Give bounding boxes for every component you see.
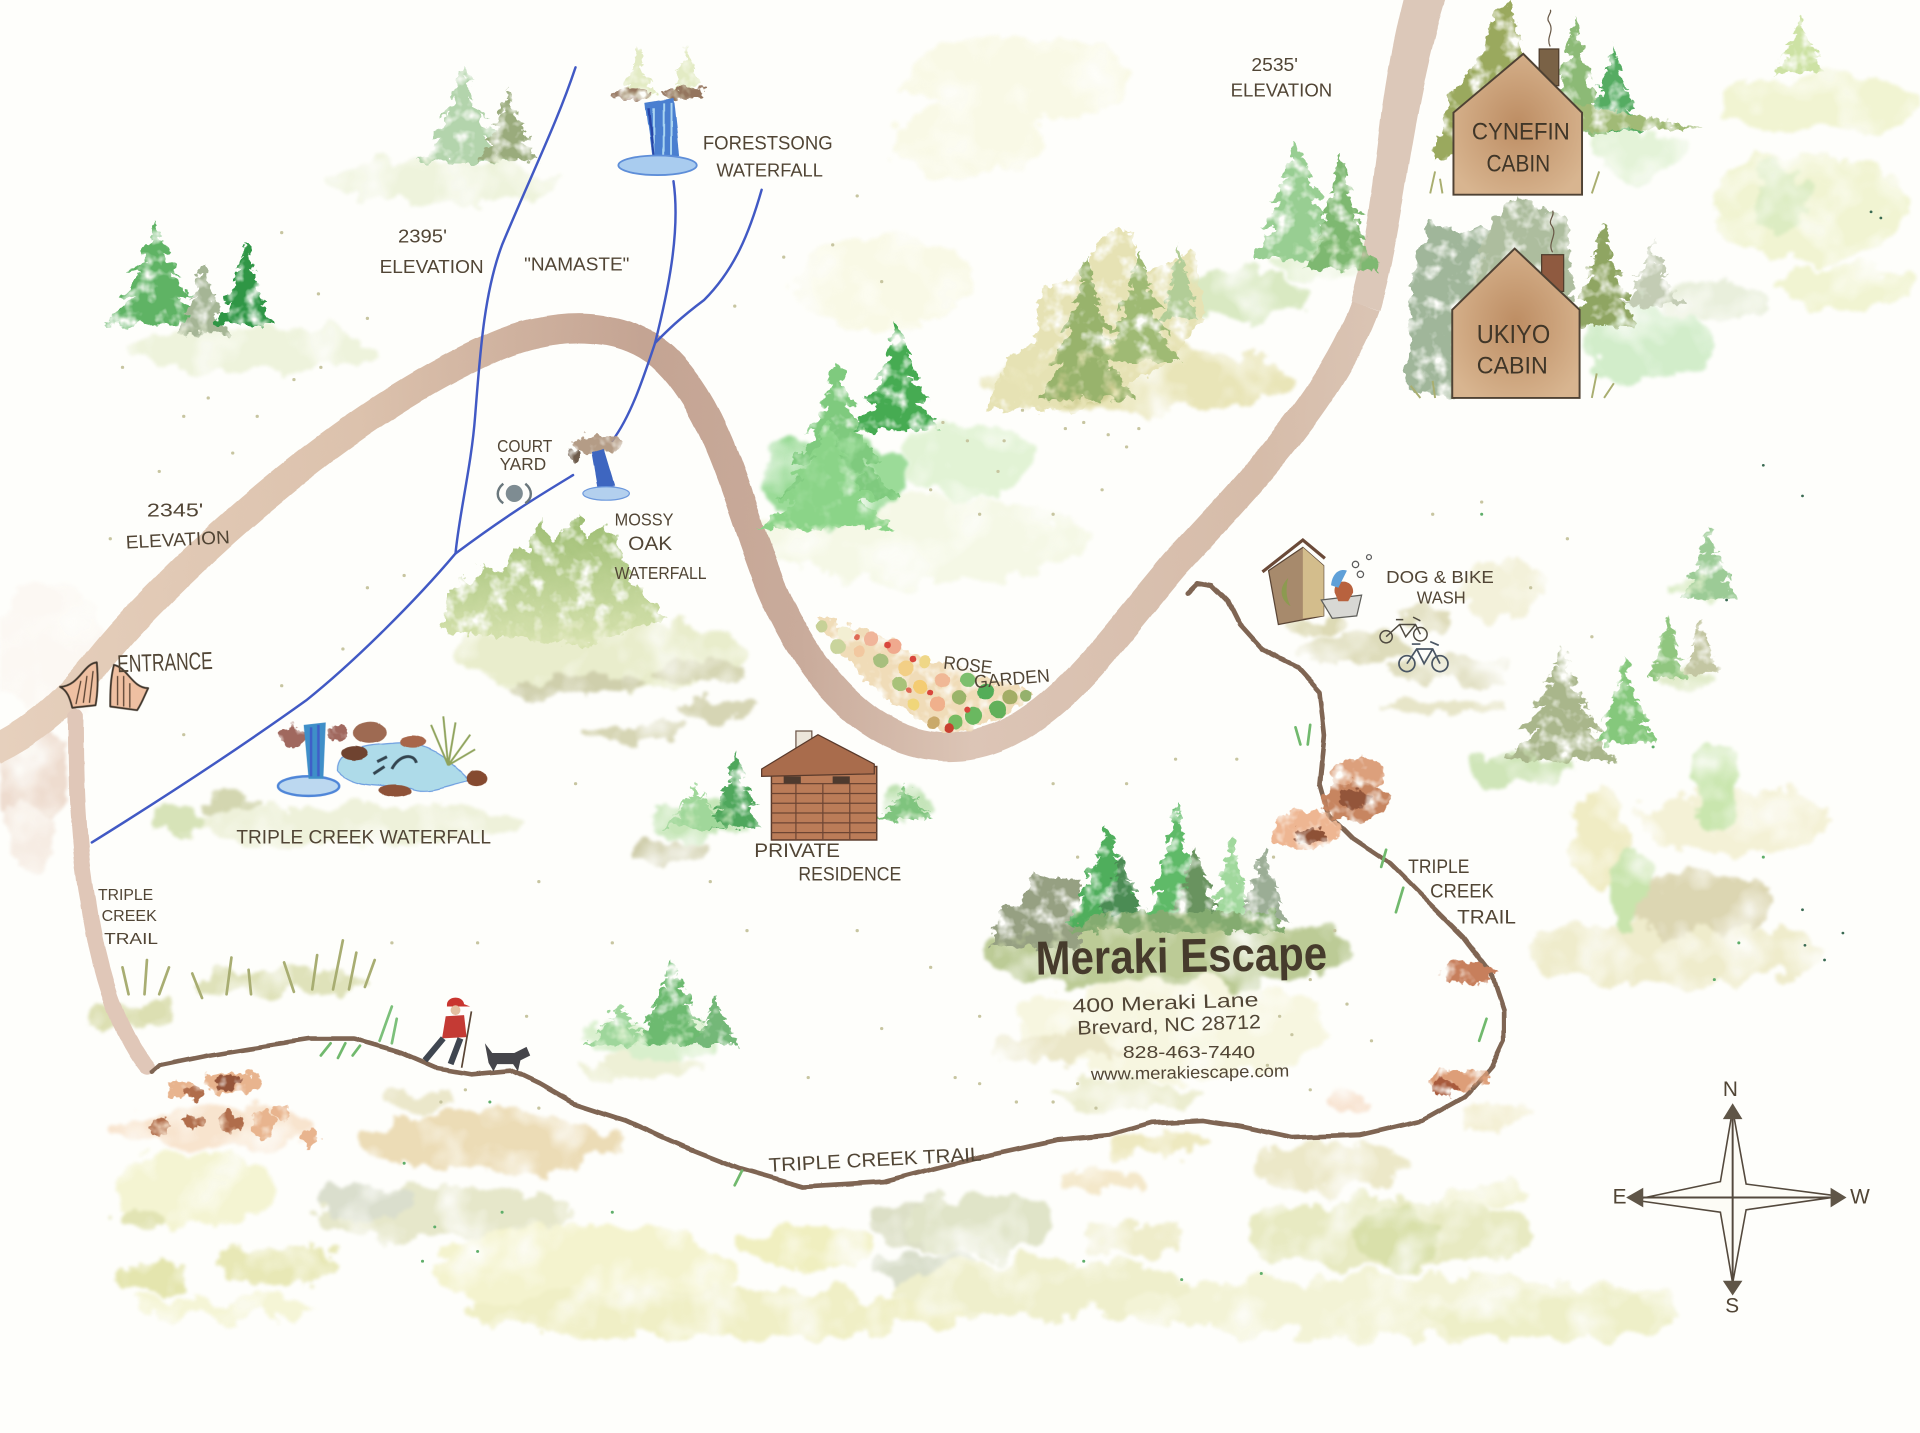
smoke [1548,10,1551,47]
rocks [569,436,621,462]
tree group: behind cynefin cabin [1433,0,1704,159]
wash: entrance stain [0,582,104,873]
label: mossy oak waterfall: WATERFALL [615,563,707,583]
dog [1334,582,1353,601]
needles [1633,1109,1840,1283]
hiking stick [462,1011,471,1068]
wash: meraki title meadow [986,916,1353,1109]
label: forestsong waterfall: FORESTSONG [703,132,833,154]
label: rose garden: ROSE [942,652,993,678]
moon [1282,578,1291,606]
falls [591,449,615,489]
entrance gates [60,662,148,710]
tree group: lower center [585,960,739,1045]
label: private residence: PRIVATE [754,840,840,862]
tree group: right side pines [1504,15,1825,761]
tree group: olive cluster [986,230,1206,410]
stream: main [92,181,676,842]
wash: right meadows [1286,563,1834,986]
hiker [425,998,471,1068]
road top right section [1351,0,1447,311]
label: 2345 elevation: ELEVATION [125,526,230,553]
icon: tandem bicycle [1399,642,1448,672]
cardinal labels [1613,1078,1870,1318]
blossoms [817,621,1032,733]
pool [338,743,470,791]
grass [431,716,475,765]
trail rocks [149,759,1494,1146]
label: triple creek trail south: TRIPLE CREEK TRAIL [768,1144,982,1177]
label: dog and bike wash [1386,567,1494,608]
cardinal labels: N [1723,1078,1738,1101]
walls [771,767,877,840]
legs [425,1038,460,1064]
body [442,1015,467,1038]
tree group: meraki forest [989,802,1291,949]
streams [92,67,762,842]
label: mossy oak waterfall: MOSSY [615,509,674,529]
ragged rocks by falls [278,726,349,748]
label: private residence [754,840,901,885]
wash: bottom band [109,1084,1681,1338]
cynefin label: CABIN [1487,150,1550,177]
tree group: pines beside road [1247,137,1379,270]
ukiyo cabin [1452,211,1580,398]
logs [771,784,877,840]
label: triple creek trail east [1408,856,1516,928]
address block: 400 Meraki Lane [1072,989,1259,1018]
shed side [1303,547,1324,618]
label: forestsong waterfall [703,132,833,180]
title: meraki escape: Meraki Escape [1035,928,1327,986]
wash: top center [796,37,1127,331]
label: courtyard: YARD [500,454,546,474]
house body [1453,54,1582,195]
label: 2395 elevation: 2395' [398,225,447,246]
label: triple creek trail west [98,887,158,948]
wash: left and top tree meadows [129,159,563,373]
rocks: east trail [1271,759,1494,1095]
label: dog and bike wash: WASH [1417,588,1466,608]
label: rose garden: GARDEN [973,665,1051,692]
rose garden [817,619,1033,733]
label: mossy oak waterfall [615,509,707,583]
cynefin cabin [1453,10,1582,195]
tree group: center pines [759,320,941,529]
triple creek waterfall [278,716,487,797]
bubbles [1352,555,1371,577]
rocks [611,87,707,100]
rocks: lower left peach [168,1071,318,1146]
falls [304,722,326,779]
label: private residence: RESIDENCE [798,863,901,885]
label: dog and bike wash: DOG & BIKE [1386,567,1494,587]
label: triple creek trail east: CREEK [1430,881,1494,903]
chimney [1542,255,1564,291]
label: 2345 elevation [125,500,230,553]
label: mossy oak waterfall: OAK [628,533,672,555]
ukiyo label: UKIYO [1477,321,1550,349]
dog and bike wash [1262,540,1371,624]
roof [1262,540,1325,572]
ukiyo label [1477,321,1550,379]
label: namaste: "NAMASTE" [524,254,629,275]
label: triple creek waterfall: TRIPLE CREEK WATERFALL [236,827,491,849]
label: triple creek trail west: CREEK [102,908,157,925]
cynefin label [1472,119,1570,177]
tree group: mossy oak [441,514,667,647]
cabin grass [1411,171,1614,398]
falls streaks [311,725,318,776]
label: 2535 elevation [1231,54,1332,101]
house body [1452,249,1580,398]
wash: center meadow [747,235,1378,583]
windows [784,776,850,784]
cynefin label: CYNEFIN [1472,119,1570,146]
rocks: lower left brown [149,1074,244,1136]
smoke [1550,211,1554,252]
dark ink specks [1727,212,1881,960]
road spur to trail [76,716,147,1068]
cardinal labels: W [1850,1186,1870,1209]
dog on trail [485,1043,530,1071]
tub [1321,595,1362,618]
address block: Brevard, NC 28712 [1077,1011,1261,1040]
wash: waterfall and residence meadows [151,789,943,863]
label: 2345 elevation: 2345' [147,500,203,521]
label: 2535 elevation: 2535' [1251,54,1298,75]
splatter dots [110,196,1592,1108]
star [1633,1109,1840,1283]
label: 2535 elevation: ELEVATION [1231,80,1332,101]
basin [278,776,339,796]
rocks [342,721,487,797]
tree group: behind ukiyo cabin [1406,196,1685,398]
garden base [817,619,1033,732]
tree group: top pines [419,67,539,161]
chimney [796,731,812,753]
private residence cabin [762,731,877,840]
gate bars [76,671,130,708]
tree group: left pines [106,220,275,333]
grass tufts: lower left [122,725,1487,1185]
water spray [1331,570,1347,588]
otter and splash [373,757,416,774]
roof [762,735,874,776]
address block [1072,989,1289,1084]
shed [1269,547,1324,624]
label: 2395 elevation [380,225,484,277]
wash: top right [1580,75,1920,382]
chimney [1539,49,1559,86]
address block: www.merakiescape.com [1090,1061,1289,1084]
main road [0,306,1365,749]
label: 2395 elevation: ELEVATION [380,256,484,277]
right gate [110,665,148,710]
tree group: residence [663,753,936,828]
cap [447,998,470,1007]
arrowheads [1626,1103,1847,1295]
label: rose garden [942,652,1051,692]
green ink specks [404,514,1763,1280]
label: triple creek trail east: TRAIL [1457,906,1516,928]
stream: east branch [655,190,762,343]
ukiyo label: CABIN [1477,352,1548,379]
triple creek trail [152,583,1504,1187]
mossy oak waterfall [569,436,629,500]
cardinal labels: E [1613,1186,1627,1209]
pool [583,487,629,500]
label: entrance: ENTRANCE [117,648,213,678]
wash: mossy oak meadow [453,616,758,740]
falls [645,98,680,159]
head [451,1005,460,1015]
courtyard icon [498,484,531,503]
forestsong waterfall [611,47,707,175]
label: courtyard: COURT [497,436,553,456]
address block: 828-463-7440 [1123,1042,1255,1062]
icon: bicycle [1380,617,1427,643]
label: triple creek trail west: TRAIL [104,931,158,948]
pines behind falls [620,47,703,97]
compass rose [1613,1078,1870,1318]
pool [618,156,697,175]
cardinal labels: S [1725,1295,1739,1318]
label: triple creek trail east: TRIPLE [1408,856,1469,878]
wash: lower left grass patches [85,969,716,1080]
left gate [60,662,98,708]
label: triple creek trail west: TRIPLE [98,887,153,904]
stream: west [456,67,576,553]
label: courtyard [497,436,553,474]
label: forestsong waterfall: WATERFALL [716,159,823,180]
